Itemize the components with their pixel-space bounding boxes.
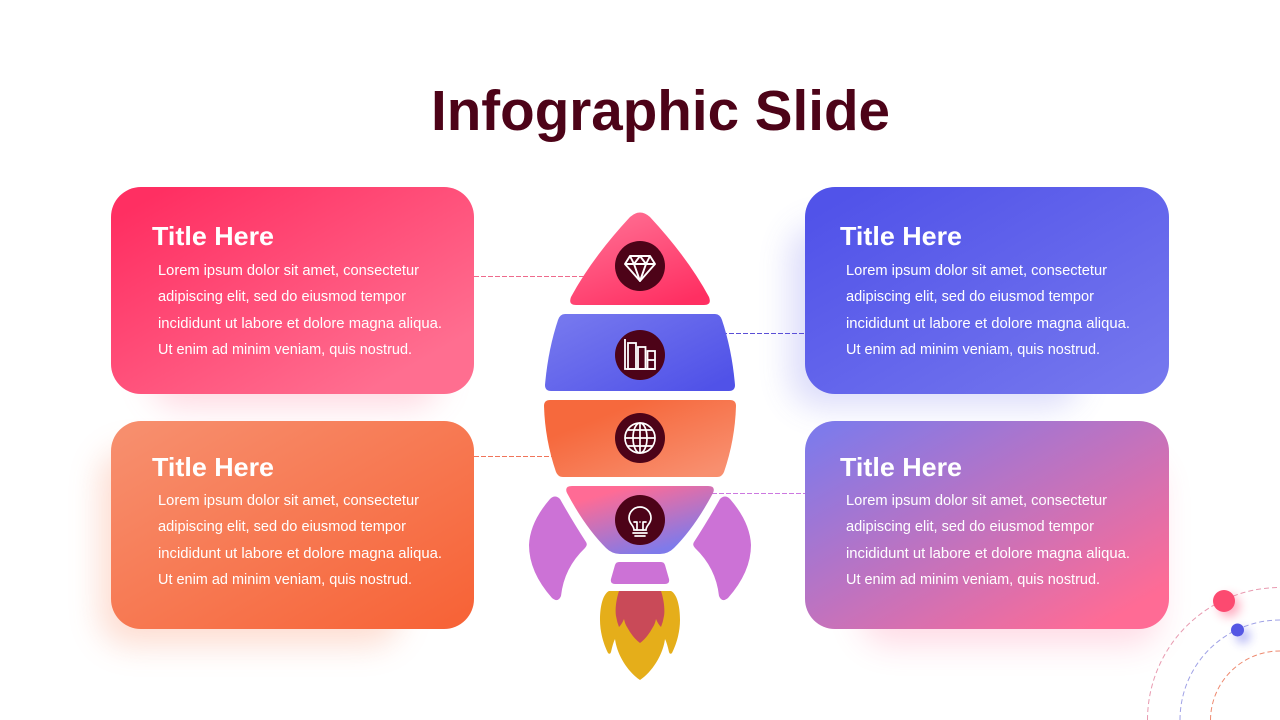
rocket nozzle [611, 562, 669, 584]
rocket lower body [566, 486, 714, 554]
icon: light bulb [629, 507, 651, 536]
card text [846, 263, 1130, 358]
connector: bottom left [474, 456, 552, 458]
card text: incididunt ut labore et dolore magna aliqua. [158, 316, 442, 332]
panel: bottom right card [805, 421, 1169, 645]
connector: bottom right [712, 492, 805, 494]
panel: top left card [111, 187, 474, 407]
panel: top right card [790, 187, 1169, 407]
icon: diamond [625, 256, 655, 281]
decorative orbits [1148, 588, 1280, 720]
rocket flame [600, 591, 680, 680]
connector: top left [474, 276, 586, 278]
card text: Ut enim ad minim veniam, quis nostrud. [846, 572, 1100, 588]
connector: top right [722, 332, 805, 334]
card text [158, 263, 442, 358]
card text: incididunt ut labore et dolore magna aliqua. [846, 316, 1130, 332]
card text: adipiscing elit, sed do eiusmod tempor [158, 519, 406, 535]
card text: incididunt ut labore et dolore magna aliqua. [158, 546, 442, 562]
rocket nose [570, 212, 710, 305]
card text: incididunt ut labore et dolore magna aliqua. [846, 546, 1130, 562]
rocket [529, 212, 751, 680]
card heading: Title Here [840, 452, 962, 482]
card heading: Title Here [152, 221, 274, 251]
rocket upper body [545, 314, 735, 391]
orbit dot: blue [1231, 624, 1250, 643]
card text: Ut enim ad minim veniam, quis nostrud. [158, 342, 412, 358]
card heading: Title Here [152, 452, 274, 482]
right fin [693, 496, 751, 600]
card text: adipiscing elit, sed do eiusmod tempor [846, 519, 1094, 535]
card text: Ut enim ad minim veniam, quis nostrud. [158, 572, 412, 588]
card text: Ut enim ad minim veniam, quis nostrud. [846, 342, 1100, 358]
left fin [529, 496, 587, 600]
card text: Lorem ipsum dolor sit amet, consectetur [158, 493, 419, 509]
card text: adipiscing elit, sed do eiusmod tempor [846, 289, 1094, 305]
icon: bar chart [625, 339, 655, 369]
orbit dot: pink [1213, 590, 1240, 617]
card text: Lorem ipsum dolor sit amet, consectetur [846, 263, 1107, 279]
card text [846, 493, 1130, 588]
rocket middle body [544, 400, 736, 477]
panel: bottom left card [100, 421, 474, 645]
icon: globe [625, 423, 655, 453]
card text: Lorem ipsum dolor sit amet, consectetur [158, 263, 419, 279]
card heading: Title Here [840, 221, 962, 251]
card text [158, 493, 442, 588]
title: Infographic Slide [431, 79, 890, 143]
card text: Lorem ipsum dolor sit amet, consectetur [846, 493, 1107, 509]
card text: adipiscing elit, sed do eiusmod tempor [158, 289, 406, 305]
